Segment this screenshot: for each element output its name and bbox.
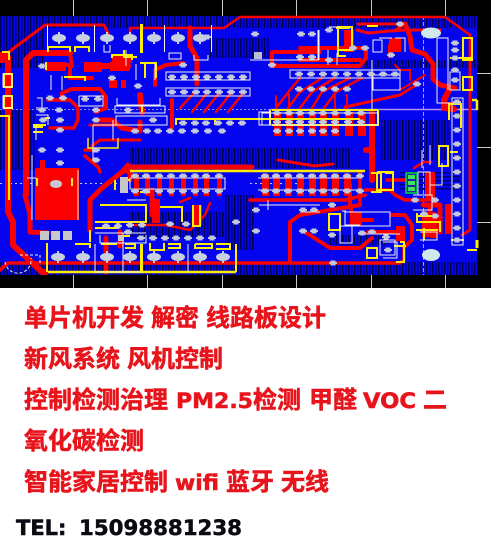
telephone contact: 15098881238 <box>79 516 242 540</box>
text line 1: 单片机开发 <box>24 298 144 333</box>
text line 1: 解密 <box>151 298 199 333</box>
text line 3: 控制检测治理 <box>24 380 168 415</box>
text line 3: PM2.5 <box>176 389 253 413</box>
registration ticks <box>74 0 491 288</box>
text line 1 <box>24 298 326 333</box>
PCB layout image <box>0 0 491 288</box>
text line 5: 无线 <box>281 462 329 497</box>
white silkscreen outlines <box>3 25 463 273</box>
text line 2 <box>24 339 223 374</box>
text line 1: 线路板设计 <box>206 298 326 333</box>
yellow silkscreen <box>0 24 477 272</box>
text line 3: 二 <box>423 380 447 415</box>
text line 3: 甲醛 <box>309 380 357 415</box>
text line 3: 检测 <box>253 380 301 415</box>
text line 3 <box>24 380 447 415</box>
red copper component pads <box>0 30 453 241</box>
text line 4: 氧化碳检测 <box>24 421 144 456</box>
telephone contact: TEL: <box>16 516 66 540</box>
text line 5 <box>24 462 329 497</box>
small component pads <box>38 22 461 266</box>
large mounting pads <box>50 28 441 263</box>
text line 3: VOC <box>363 389 416 413</box>
text line 5: wifi <box>175 471 219 495</box>
dotted axis lines <box>0 16 478 275</box>
dark striped copper bands <box>0 16 480 275</box>
text line 2: 风机控制 <box>127 339 223 374</box>
green highlighted component <box>406 173 417 193</box>
text line 5: 智能家居控制 <box>24 462 168 497</box>
promotional text block <box>24 298 447 497</box>
red traces <box>0 17 470 272</box>
text line 2: 新风系统 <box>24 339 120 374</box>
text line 5: 蓝牙 <box>226 462 274 497</box>
